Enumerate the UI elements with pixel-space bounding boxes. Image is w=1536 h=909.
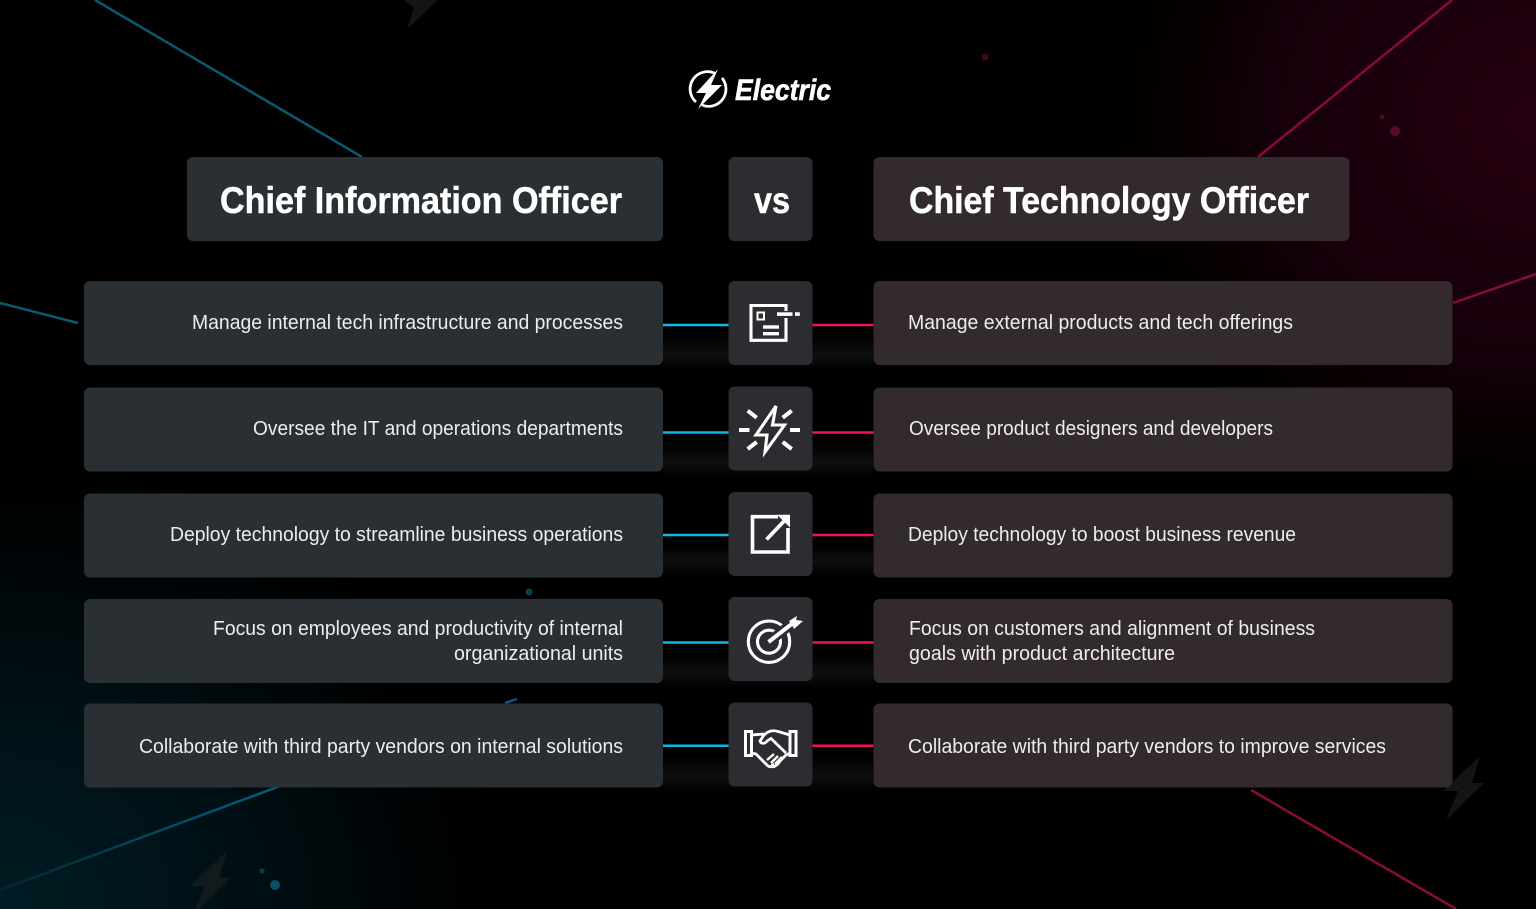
connector left	[663, 641, 728, 644]
icon tile: external link arrow	[728, 492, 812, 576]
left card: Deploy technology to streamline business operations	[170, 524, 623, 546]
left card: Manage internal tech infrastructure and processes	[192, 312, 623, 334]
left card	[84, 388, 663, 472]
icon tile: target	[728, 597, 812, 681]
connector right	[812, 641, 874, 644]
right card	[874, 704, 1452, 788]
left card: organizational units	[454, 643, 623, 665]
row 4: focus	[84, 597, 1452, 683]
left card: Collaborate with third party vendors on internal solutions	[139, 736, 623, 758]
left card	[84, 281, 663, 365]
connector right	[812, 324, 874, 326]
logo: Electric	[690, 69, 831, 109]
icon tile: handshake	[728, 702, 812, 786]
connector right	[812, 744, 874, 747]
header: Chief Information Officer: Chief Information Officer	[220, 180, 622, 221]
logo wordmark: Electric	[735, 74, 831, 107]
header: vs: vs	[754, 180, 790, 221]
row 2: departments	[84, 386, 1452, 472]
row 3: deploy technology	[84, 492, 1452, 578]
right card: Oversee product designers and developers	[909, 418, 1273, 440]
left card: Focus on employees and productivity of internal	[213, 618, 623, 640]
icon tile: bolt with rays	[728, 386, 812, 470]
connector right	[812, 431, 874, 434]
right card: Collaborate with third party vendors to improve services	[908, 736, 1386, 758]
left card: Oversee the IT and operations departments	[253, 418, 623, 440]
connector right	[812, 534, 874, 536]
connector left	[663, 744, 728, 747]
left card	[84, 704, 663, 788]
connector left	[663, 324, 728, 326]
icon: logo lightning bolt	[690, 69, 726, 109]
connector left	[663, 534, 728, 536]
header: Chief Technology Officer: Chief Technology Officer	[909, 180, 1309, 221]
right card: Focus on customers and alignment of business	[909, 618, 1315, 640]
right card: goals with product architecture	[909, 643, 1175, 665]
row 5: collaborate	[84, 702, 1452, 788]
header: Chief Technology Officer	[874, 157, 1350, 241]
connector left	[663, 431, 728, 434]
right card: Manage external products and tech offerings	[908, 312, 1293, 334]
right card	[874, 494, 1452, 578]
header: Chief Information Officer	[187, 157, 663, 241]
right card	[874, 599, 1452, 683]
row 1: infrastructure	[84, 281, 1452, 365]
right card	[874, 388, 1452, 472]
left card	[84, 494, 663, 578]
header: vs	[728, 157, 812, 241]
icon tile: document	[728, 281, 812, 365]
right card	[874, 281, 1452, 365]
right card: Deploy technology to boost business revenue	[908, 524, 1296, 546]
left card	[84, 599, 663, 683]
